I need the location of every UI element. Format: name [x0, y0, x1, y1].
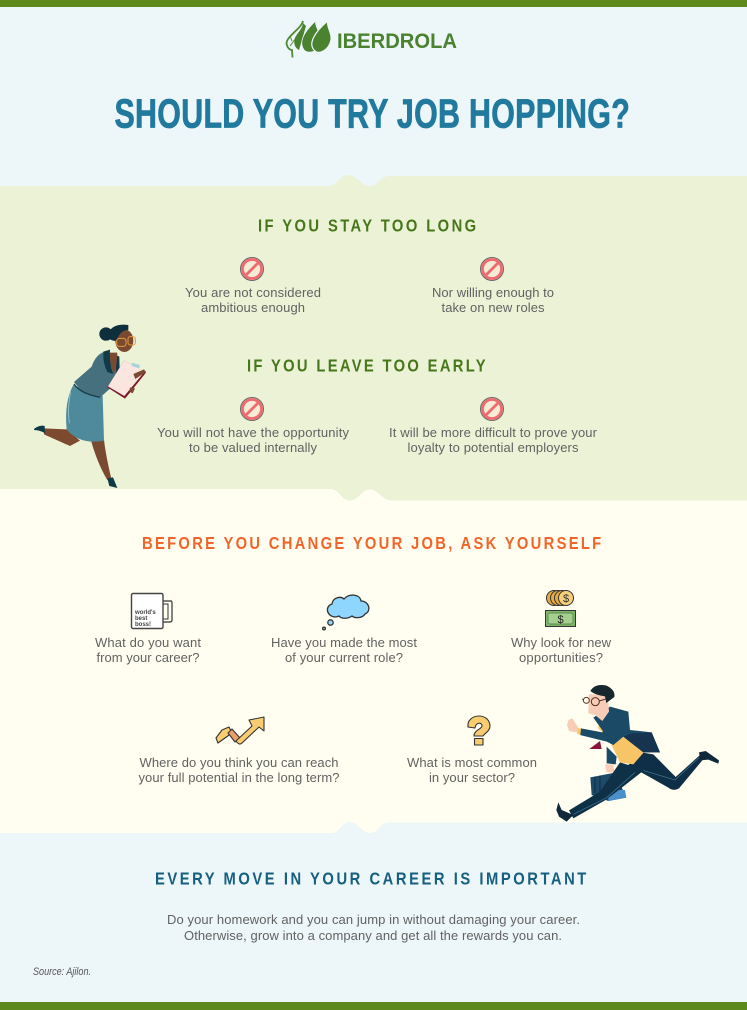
text	[95, 635, 201, 665]
text: Do your homework and you can jump in without damaging your career.	[167, 912, 580, 927]
text	[389, 425, 598, 455]
icon: coins and banknote	[546, 590, 576, 626]
text: Where do you think you can reach	[140, 755, 338, 770]
text	[432, 285, 554, 315]
text: Why look for new	[511, 635, 612, 650]
text: loyalty to potential employers	[408, 440, 579, 455]
heading: if you stay too long: IF YOU STAY TOO LONG	[258, 216, 476, 236]
icon: question mark	[468, 716, 490, 745]
illustration: woman with clipboard	[34, 325, 146, 488]
text	[271, 635, 417, 665]
item: not willing	[432, 258, 554, 315]
heading: every move: EVERY MOVE IN YOUR CAREER IS IMPORTANT	[155, 869, 586, 889]
icon: coins and banknote: $	[563, 593, 569, 605]
text	[511, 635, 612, 665]
panel: green section background	[0, 175, 747, 500]
item: career	[95, 594, 201, 665]
text: Have you made the most	[271, 635, 417, 650]
heading: if you leave too early: IF YOU LEAVE TOO EARLY	[247, 356, 486, 376]
icon: mug: world's	[134, 610, 156, 616]
text: take on new roles	[442, 300, 545, 315]
text: Otherwise, grow into a company and get all the rewards you can.	[184, 928, 562, 943]
icon: rising arrow	[216, 717, 264, 744]
item: sector	[407, 716, 537, 785]
icon: mug	[132, 594, 172, 628]
icon: mug: best	[135, 616, 147, 622]
text: You are not considered	[185, 285, 321, 300]
item: current role	[271, 595, 417, 665]
source note: Source: Ajilon.	[33, 966, 91, 978]
text	[167, 912, 580, 943]
icon: coins and banknote: $	[557, 614, 564, 626]
text: from your career?	[96, 650, 200, 665]
text: What is most common	[407, 755, 537, 770]
icon: logo leaves	[286, 21, 331, 58]
item: not ambitious	[185, 258, 321, 315]
top bar	[0, 0, 747, 7]
icon: prohibition sign	[480, 258, 504, 280]
text: of your current role?	[285, 650, 403, 665]
text: your full potential in the long term?	[138, 770, 340, 785]
item: loyalty	[389, 398, 598, 455]
logo	[286, 21, 457, 58]
illustration: running businessman	[556, 685, 719, 822]
text	[138, 755, 340, 785]
item: not valued	[157, 398, 350, 455]
logo wordmark: IBERDROLA	[337, 30, 457, 53]
icon: prohibition sign	[240, 398, 264, 420]
panel: cream section background	[0, 489, 747, 833]
text: ambitious enough	[201, 300, 305, 315]
bottom bar	[0, 1002, 747, 1010]
text: to be valued internally	[189, 440, 318, 455]
icon: prohibition sign	[240, 258, 264, 280]
icon: thought bubble	[323, 595, 369, 630]
text: It will be more difficult to prove your	[389, 425, 598, 440]
text	[157, 425, 350, 455]
text: opportunities?	[519, 650, 603, 665]
heading: before you change your job: BEFORE YOU CHANGE YOUR JOB, ASK YOURSELF	[142, 534, 601, 553]
item: full potential	[138, 717, 340, 785]
text: What do you want	[95, 635, 201, 650]
icon: mug: boss!	[135, 622, 151, 628]
text	[407, 755, 537, 785]
title: SHOULD YOU TRY JOB HOPPING?	[114, 91, 630, 137]
text: in your sector?	[429, 770, 515, 785]
panel: closing message	[155, 869, 586, 943]
text: Nor willing enough to	[432, 285, 554, 300]
icon: prohibition sign	[480, 398, 504, 420]
text	[185, 285, 321, 315]
text: You will not have the opportunity	[157, 425, 350, 440]
item: new opportunities	[511, 590, 612, 665]
